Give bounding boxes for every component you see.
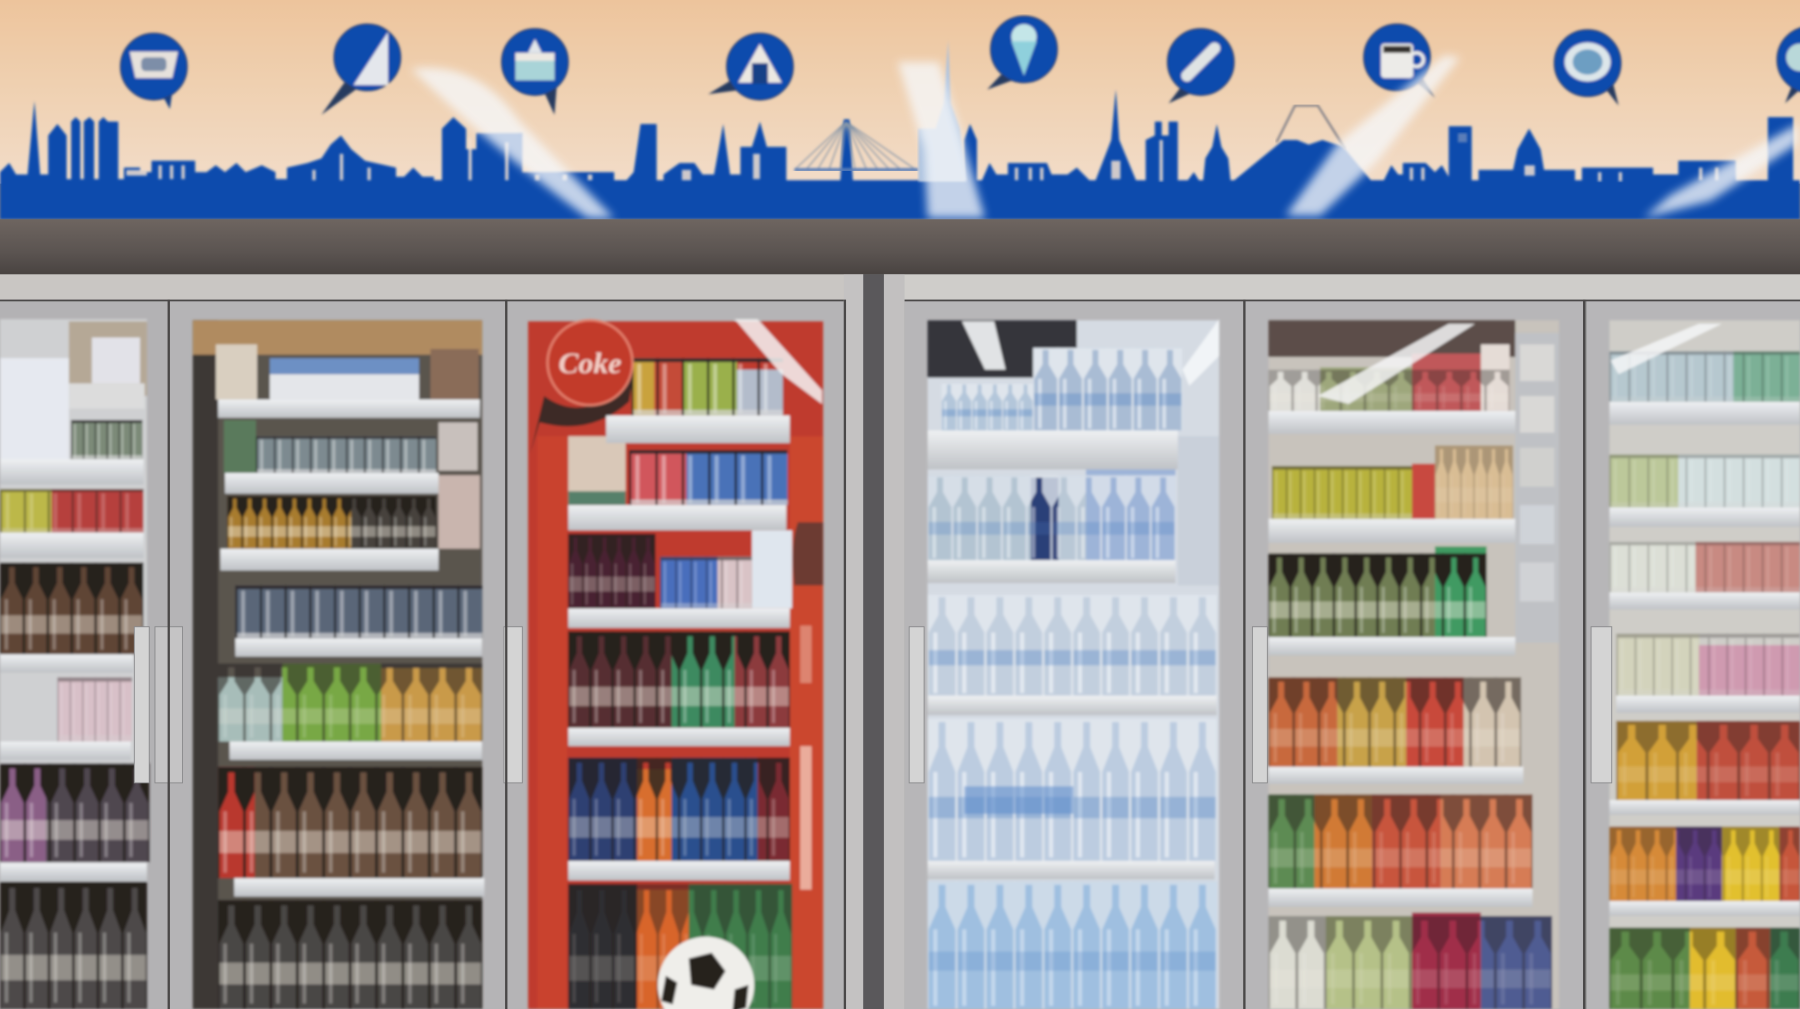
row 3 cartons bbox=[1609, 542, 1800, 592]
door 3 interior bbox=[528, 319, 823, 1009]
row 7 mixed bottles bbox=[1609, 927, 1800, 1009]
icon: sandwich bbox=[321, 24, 401, 115]
door 2 row 2 tins bbox=[224, 420, 478, 473]
icon: hot dog bbox=[1167, 29, 1234, 103]
door 1 shelves bbox=[0, 459, 147, 880]
door 4 water bbox=[905, 300, 1243, 1009]
row 6 mixed bottles bbox=[1609, 826, 1800, 901]
door 1 bbox=[0, 300, 168, 1009]
casing header right bbox=[884, 274, 1800, 300]
door 1 shelf row mixed bbox=[0, 763, 149, 862]
door 3 glass reflection bbox=[735, 319, 822, 404]
row 6 bottles bbox=[568, 884, 792, 1009]
icon: bun bbox=[1554, 30, 1621, 106]
row 4 water bottles bbox=[928, 719, 1217, 861]
blue base band bbox=[0, 180, 1800, 219]
Mount Fuji outline bbox=[1277, 106, 1345, 149]
row 1 cartons bbox=[1609, 351, 1800, 402]
skyline middle: towers, spires and bridge pylon bbox=[442, 117, 853, 181]
door 2 row 1 stacked boxes bbox=[216, 344, 479, 399]
poster vertical text bbox=[800, 626, 812, 890]
door 3 frame bbox=[507, 300, 844, 1009]
speech bubble icons bbox=[121, 16, 1800, 115]
icon: coffee cup bbox=[1364, 24, 1435, 98]
door 2 bbox=[170, 300, 505, 1009]
icon: cropped bubble bbox=[1777, 26, 1800, 103]
door 2 row 5 green and orange bottles bbox=[218, 663, 482, 742]
door 6 frame bbox=[1586, 300, 1800, 1009]
row 1 drinks bbox=[1268, 344, 1510, 411]
door 5 frame bbox=[1246, 300, 1583, 1009]
row 1 cans bbox=[631, 358, 783, 416]
door 4 frame bbox=[905, 300, 1243, 1009]
door 5 interior bbox=[1268, 320, 1559, 1009]
door 5 shelves bbox=[1268, 411, 1533, 907]
side label column bbox=[1515, 333, 1559, 643]
door 5 juices bbox=[1246, 300, 1583, 1009]
Tokyo Skytree bbox=[918, 40, 967, 181]
door 2 frame bbox=[170, 300, 505, 1009]
skyline right: Tokyo Tower, pagoda and Fuji bbox=[1095, 90, 1372, 181]
fridge casing bbox=[0, 274, 1800, 1009]
door 1 bottom bottles bbox=[0, 882, 147, 1009]
soccer ball bbox=[658, 937, 754, 1009]
row 6 drinks bbox=[1268, 913, 1552, 1009]
icon: bento box bbox=[121, 33, 187, 109]
logo cap bbox=[530, 320, 634, 453]
row 3 drinks bbox=[1268, 546, 1487, 637]
row 2 water bottles bbox=[928, 436, 1219, 585]
door 1 shelf row pink bbox=[57, 677, 132, 742]
row 4 cartons bbox=[1616, 634, 1800, 696]
door 2 shelves bbox=[218, 399, 484, 897]
skyline frieze bbox=[0, 90, 1800, 219]
door 1 top products bbox=[69, 321, 147, 459]
row 5 juices bbox=[1268, 794, 1533, 888]
poster brown accent bbox=[793, 522, 823, 585]
door handles bbox=[134, 627, 1612, 783]
door 3 shelves bbox=[568, 416, 790, 880]
door 1 frame bbox=[0, 300, 168, 1009]
row 4 juices bbox=[1268, 677, 1521, 767]
row 1 water bottles bbox=[941, 348, 1182, 430]
row 5 water bottles bbox=[928, 882, 1217, 1009]
door 5 glass reflection bbox=[1318, 324, 1475, 404]
skyline left: Bangkok towers and temple bbox=[0, 101, 434, 181]
window glare on frieze bbox=[411, 55, 1798, 218]
door 2 row 4 dark blue drinks bbox=[235, 585, 482, 638]
dark fascia bbox=[0, 219, 1800, 274]
door 1 price sign bbox=[0, 358, 69, 461]
casing header left bbox=[0, 274, 863, 300]
door 2 row 7 dark bottles bbox=[218, 900, 482, 1009]
icon: ice cream bbox=[987, 16, 1057, 90]
cable-stayed bridge bbox=[794, 122, 918, 170]
door 2 row 6 brown bottles bbox=[218, 767, 482, 878]
logo cap: Coke bbox=[559, 347, 622, 380]
icon: rice ball bbox=[708, 33, 793, 100]
door 1 shelf row brown bottles bbox=[0, 562, 143, 654]
door 6 interior bbox=[1609, 320, 1800, 1009]
door 1 shelf row yellow and red bbox=[0, 489, 143, 533]
door 3 cola poster bbox=[507, 300, 844, 1009]
skyline far right: gates, palace and towers bbox=[1383, 117, 1793, 181]
door 2 row 3 amber bottles bbox=[227, 475, 480, 549]
red poster bbox=[528, 321, 823, 1009]
row 5 bottles bbox=[568, 758, 790, 861]
door 6 dairy bbox=[1586, 300, 1800, 1009]
door 6 shelves bbox=[1609, 402, 1800, 916]
door 1 interior bbox=[0, 319, 149, 1009]
wall background bbox=[0, 0, 1800, 184]
icon: cake bbox=[502, 29, 568, 115]
row 4 bottles bbox=[568, 631, 790, 728]
row 3 water bottles bbox=[928, 595, 1217, 696]
door 4 glass reflection bbox=[962, 319, 1219, 386]
door 6 glass reflection bbox=[1611, 324, 1722, 374]
door 2 interior bbox=[193, 320, 484, 1009]
door 4 shelves bbox=[928, 430, 1217, 879]
row 2 drinks bbox=[1272, 445, 1513, 519]
door frame seams bbox=[0, 300, 1800, 1009]
skyline centre: Skytree flanks and low buildings bbox=[964, 124, 1091, 181]
row 2 cartons bbox=[1609, 455, 1800, 507]
skyline window gaps bbox=[126, 133, 1718, 181]
central post bbox=[844, 274, 863, 1009]
row 5 yellow and red bottles bbox=[1616, 721, 1800, 800]
row 3 bottles and cans bbox=[568, 530, 792, 608]
door 4 interior bbox=[928, 319, 1219, 1009]
row 2 cans bbox=[568, 436, 788, 505]
